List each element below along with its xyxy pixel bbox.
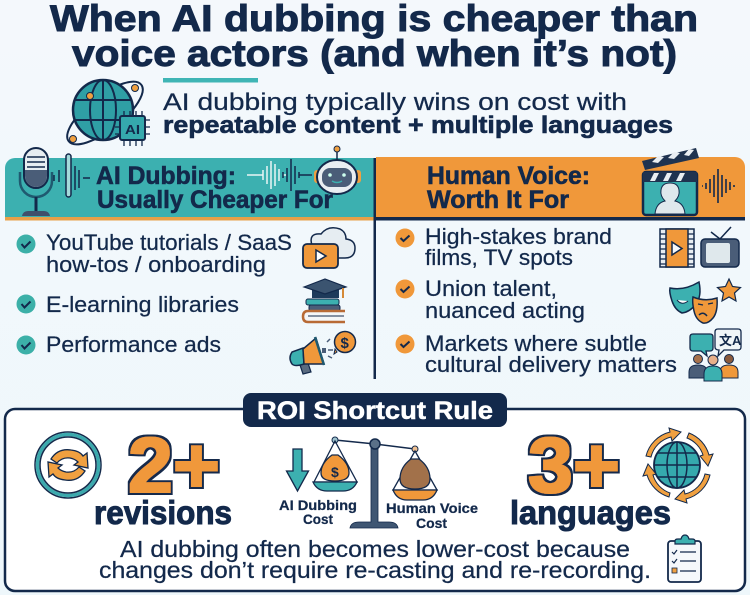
icon: globe with AI chip: AI xyxy=(125,122,140,137)
label: AI dubbing cost: AI Dubbing xyxy=(279,497,357,513)
header band: human voice xyxy=(376,157,745,220)
icon: television xyxy=(701,227,739,267)
scale graphic xyxy=(313,437,437,528)
heading badge xyxy=(243,393,507,427)
stat: 2+ revisions xyxy=(94,421,232,531)
header band: AI dubbing xyxy=(5,158,375,220)
icon: globe with AI chip xyxy=(58,71,152,155)
icon: books and graduation cap xyxy=(303,279,346,322)
list item: High-stakes xyxy=(396,224,612,270)
list item: Performance ads: Performance ads xyxy=(46,332,221,357)
heading: human voice: Human Voice: xyxy=(427,162,590,190)
list item: E-learning: E-learning libraries xyxy=(46,292,239,317)
icon: megaphone with dollar bubble: $ xyxy=(340,335,350,352)
label: AI dubbing cost xyxy=(279,497,357,527)
panel: AI dubbing xyxy=(5,146,375,374)
icon: translation speech bubbles and people: 文A xyxy=(719,333,742,348)
heading badge: ROI Shortcut Rule xyxy=(257,397,493,425)
panel frame xyxy=(5,409,745,591)
label: human voice cost: Human Voice xyxy=(386,500,478,516)
heading: human voice: Worth It For xyxy=(427,186,569,214)
stat: 3+ languages: languages xyxy=(510,494,671,531)
icon: dark waveform xyxy=(54,154,90,197)
stat: 2+ revisions: 2+ xyxy=(128,421,220,509)
list item: YouTube tutorials: how-tos / onboarding xyxy=(46,252,266,277)
list item: High-stakes: films, TV spots xyxy=(425,245,573,270)
panel: human voice xyxy=(376,148,745,381)
vertical divider xyxy=(374,158,376,379)
label: AI dubbing cost: Cost xyxy=(303,511,333,527)
takeaway text: changes don’t require re-casting and re-recording. xyxy=(99,557,651,583)
stat: 2+ revisions: revisions xyxy=(94,494,232,531)
icon: microphone xyxy=(20,148,52,216)
heading: AI dubbing: AI Dubbing: xyxy=(96,162,236,190)
icon: film strip xyxy=(660,229,694,267)
title xyxy=(50,0,698,74)
heading: human voice xyxy=(427,162,590,214)
takeaway text xyxy=(99,536,651,583)
heading: AI dubbing xyxy=(96,162,333,214)
list item: High-stakes: High-stakes brand xyxy=(425,224,612,249)
icon: cost down arrow xyxy=(286,449,308,491)
icon: white waveform xyxy=(247,161,286,189)
icon: clapperboard with person xyxy=(642,148,699,215)
list item: Union talent: Union talent, xyxy=(425,276,557,301)
label: human voice cost xyxy=(386,500,478,531)
icon: theatre masks and star xyxy=(670,279,740,323)
title underline xyxy=(163,78,258,82)
icon: cloud video xyxy=(303,228,355,268)
stat: 3+ languages: 3+ xyxy=(528,421,620,509)
scale graphic: $ xyxy=(331,464,339,480)
icon: clipboard checklist xyxy=(668,535,701,582)
stat: 3+ languages xyxy=(510,421,671,531)
icon: robot xyxy=(314,146,361,194)
takeaway text: AI dubbing often becomes lower-cost because xyxy=(120,536,630,562)
icon: translation speech bubbles and people xyxy=(689,329,742,381)
icon: megaphone with dollar bubble xyxy=(290,332,356,374)
subtitle: repeatable content + multiple languages xyxy=(163,112,673,139)
icon: dark waveform right xyxy=(702,169,734,203)
icon: dark waveform 2 xyxy=(283,159,312,191)
label: human voice cost: Cost xyxy=(416,515,447,531)
list item: Markets xyxy=(396,331,677,377)
list item: YouTube tutorials: YouTube tutorials / SaaS xyxy=(46,230,292,255)
list item: YouTube tutorials xyxy=(16,230,292,277)
subtitle: AI dubbing typically wins on cost with xyxy=(163,89,627,116)
list item: Union talent: nuanced acting xyxy=(425,298,585,323)
list item: Markets: cultural delivery matters xyxy=(425,352,677,377)
heading: AI dubbing: Usually Cheaper For xyxy=(97,186,333,214)
icon: revision arrows xyxy=(35,432,101,498)
panel: ROI shortcut rule xyxy=(5,393,745,591)
list item: Markets: Markets where subtle xyxy=(425,331,647,356)
subtitle xyxy=(163,89,673,139)
title: voice actors (and when it’s not) xyxy=(72,33,677,74)
icon: globe with circular arrows xyxy=(643,428,713,503)
list item: Union talent xyxy=(396,276,585,323)
